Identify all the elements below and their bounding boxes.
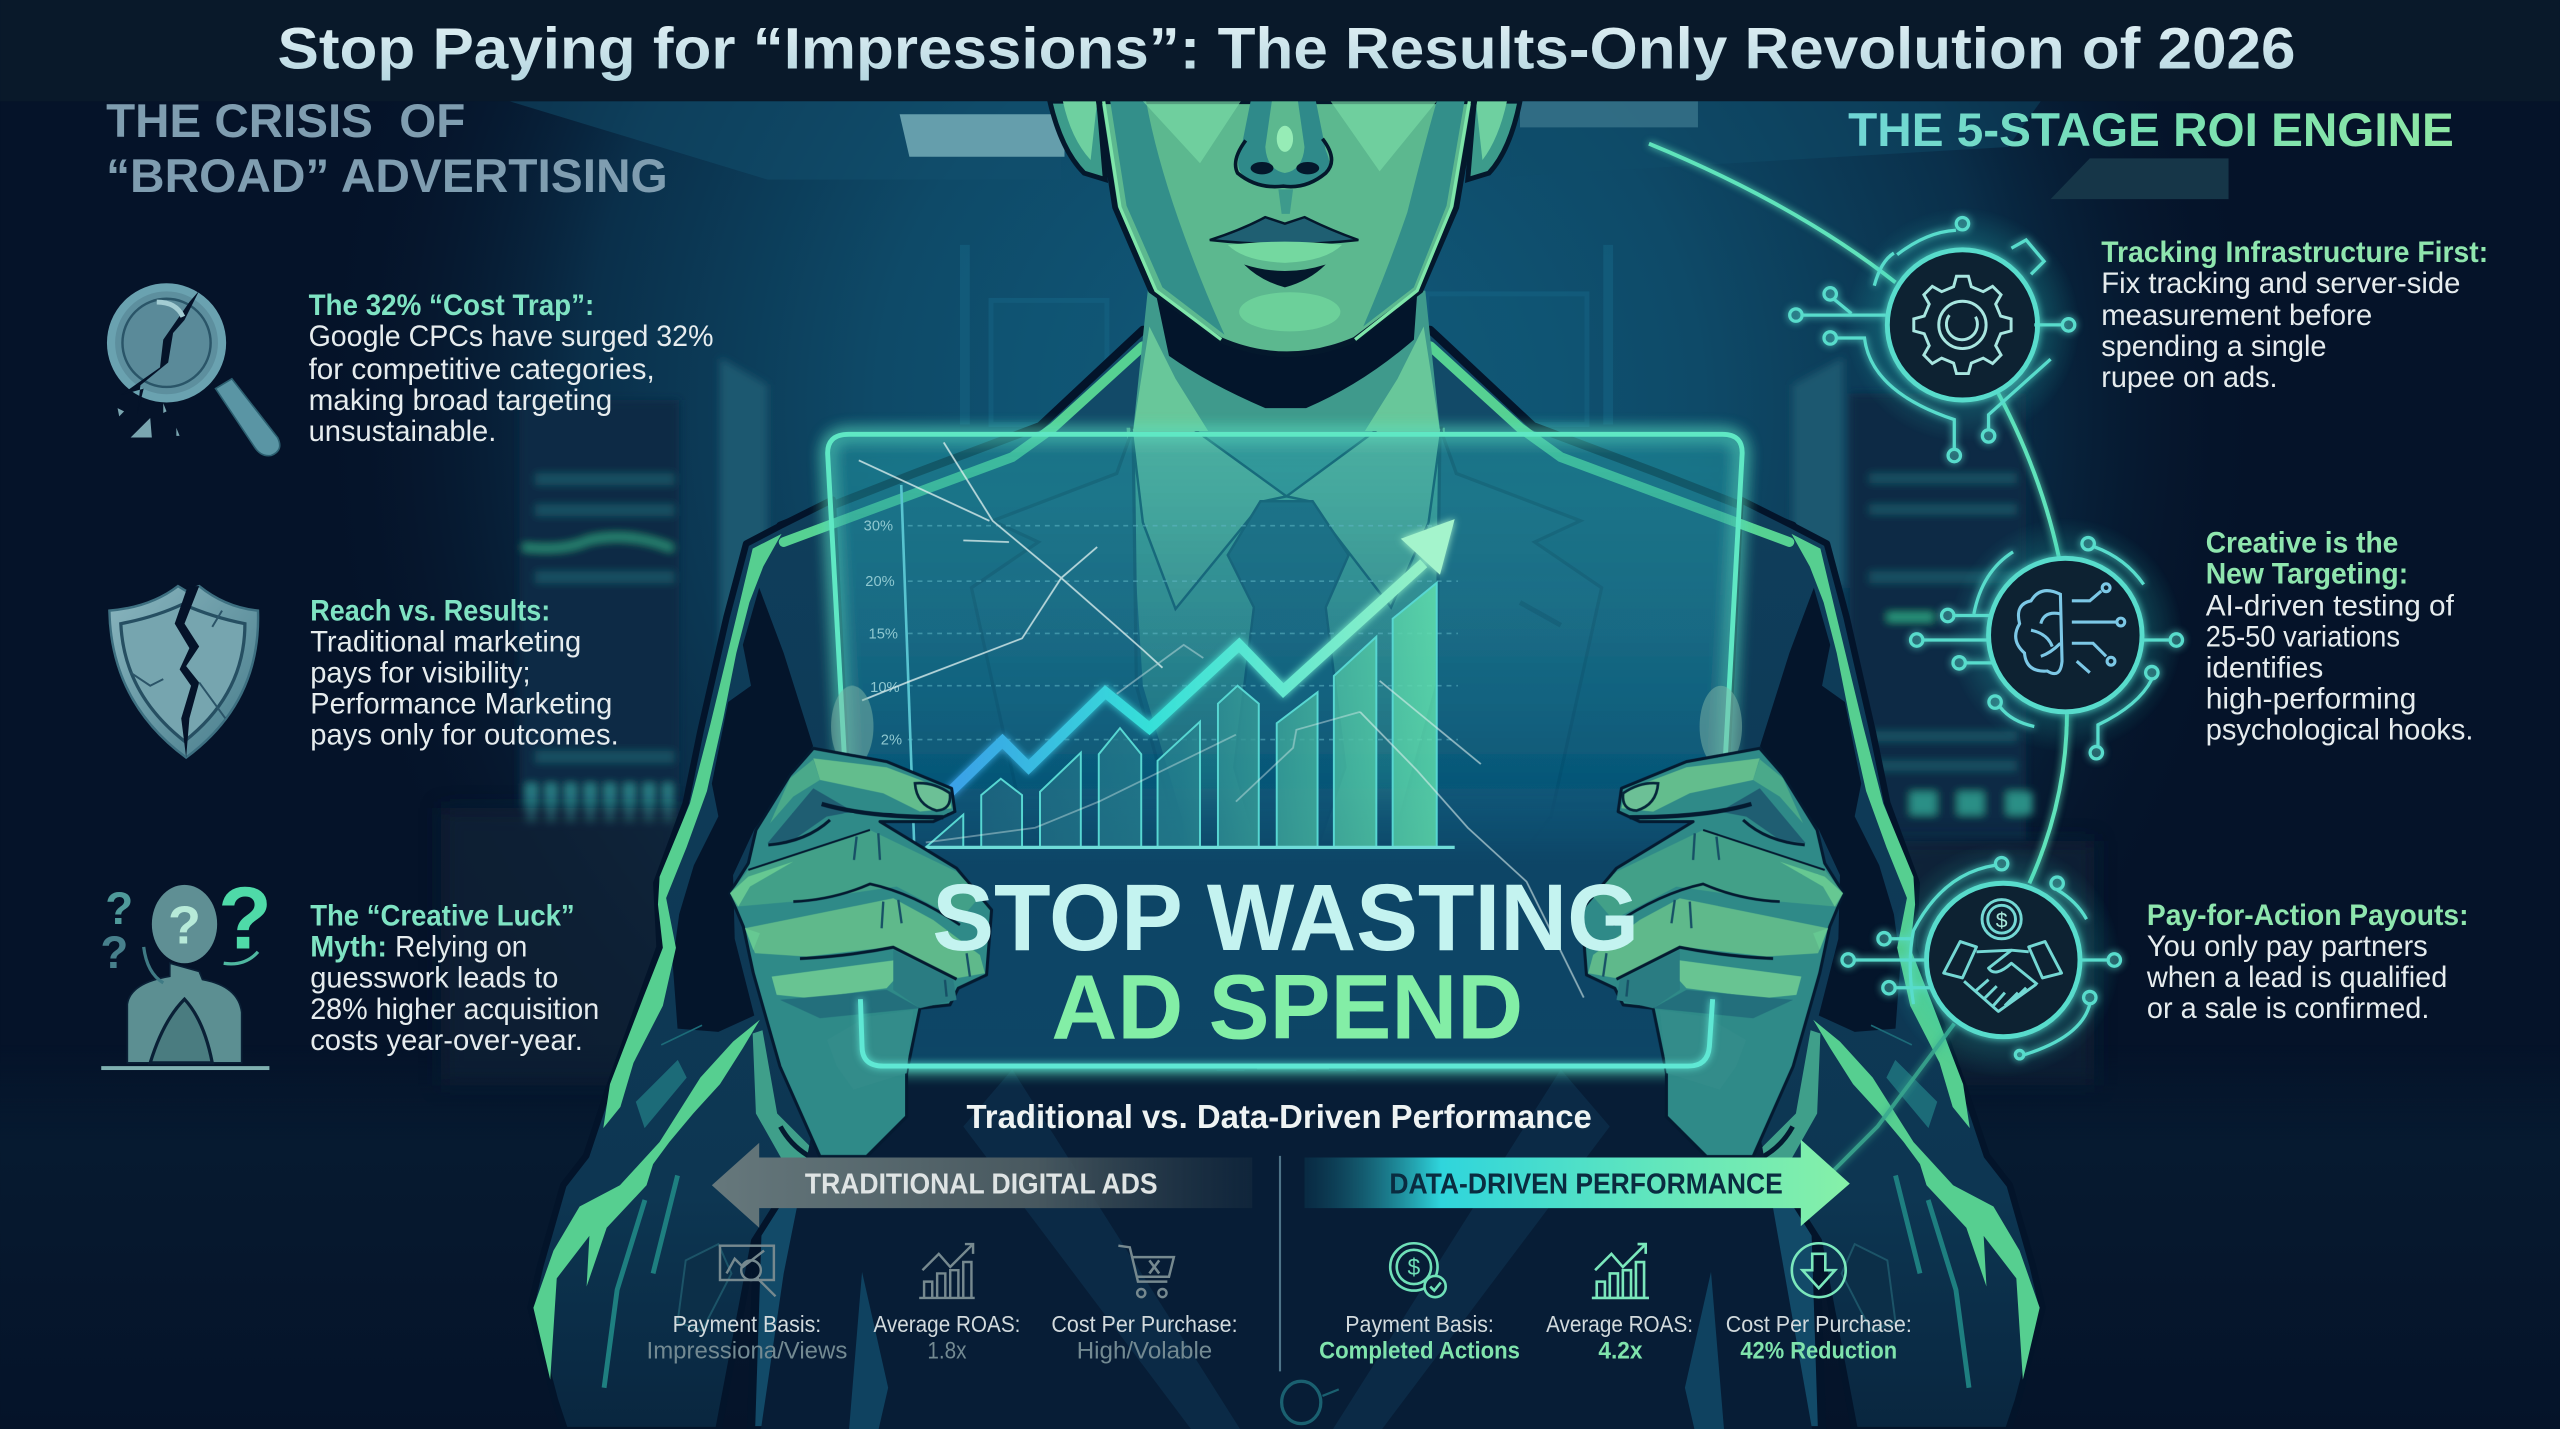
mouth [1210, 217, 1358, 244]
text: the creative luck myth: guesswork leads to [310, 962, 558, 995]
column: traditional cost per purchase: Cost Per Purchase: [1051, 1311, 1238, 1337]
tie [1228, 501, 1349, 882]
column: traditional average ROAS: 1.8x [927, 1338, 967, 1364]
text: creative is the new targeting [2206, 527, 2473, 747]
neck [1133, 291, 1440, 431]
icon: confused figure with question marks: ? [100, 927, 128, 978]
text: the 32% cost trap: unsustainable. [309, 415, 496, 448]
heading: the crisis of broad advertising [106, 95, 668, 203]
icon: confused figure with question marks [100, 869, 272, 1070]
chart grid and axis labels: 20% [865, 574, 895, 590]
shoulder highlights [784, 346, 1789, 542]
text: the creative luck myth: The “Creative Luck” [310, 900, 575, 933]
text: creative is the new targeting: identifies [2206, 652, 2323, 685]
text: pay-for-action payouts: or a sale is confirmed. [2147, 992, 2429, 1025]
text: tracking infrastructure first: Tracking Infrastructure First: [2101, 236, 2488, 269]
chart grid and axis labels [864, 485, 1458, 847]
column: data-driven payment basis [1319, 1243, 1520, 1364]
right arm [1667, 500, 2042, 1429]
heading: the crisis of broad advertising: THE CRISIS OF [106, 95, 465, 148]
text: the 32% cost trap: Google CPCs have surged 32% [309, 320, 713, 353]
column: data-driven cost per purchase [1726, 1243, 1912, 1364]
arrow: data-driven performance [1304, 1140, 1850, 1226]
text: reach vs results: Reach vs. Results: [310, 594, 550, 627]
text: the creative luck myth [310, 900, 599, 1057]
column: data-driven average ROAS: Average ROAS: [1546, 1311, 1693, 1337]
arrow: traditional digital ads [712, 1143, 1252, 1228]
text: reach vs results: pays only for outcomes. [310, 718, 619, 751]
figure: suited man [531, 101, 2042, 1429]
text: tracking infrastructure first: rupee on ads. [2101, 361, 2278, 394]
icon: shopping cart with x [1118, 1246, 1174, 1297]
text: reach vs results: Traditional marketing [310, 625, 581, 658]
left hand holding panel [729, 686, 992, 1157]
chart grid and axis labels: 10% [870, 680, 900, 696]
panel lower edge over wrists [860, 999, 1713, 1066]
column: data-driven cost per purchase: Cost Per Purchase: [1726, 1311, 1912, 1337]
chart grid and axis labels: 30% [864, 519, 893, 535]
icon: cracked shield [109, 586, 258, 758]
column: traditional cost per purchase: High/Volable [1077, 1338, 1212, 1364]
comparison divider [1279, 1156, 1281, 1371]
shirt and collar [1127, 428, 1445, 1069]
heading: the 5-stage ROI engine: THE 5-STAGE ROI ENGINE [1848, 104, 2454, 157]
text: creative is the new targeting: psychological hooks. [2206, 714, 2473, 747]
node 2: AI brain [1911, 518, 2183, 759]
icon: circle with down arrow [1792, 1243, 1846, 1297]
node 1: tracking gear [1790, 207, 2080, 462]
icon: rising bars [919, 1244, 975, 1298]
node 3: pay-for-action handshake [1842, 842, 2121, 1078]
chart grid and axis labels: 2% [881, 732, 902, 748]
title bar [0, 0, 2560, 101]
chart grid and axis labels: 15% [869, 626, 898, 642]
title bar: Stop Paying for “Impressions”: The Results-Only Revolution of 2026 [278, 17, 2296, 82]
text: pay-for-action payouts: Pay-for-Action Payouts: [2147, 899, 2469, 932]
panel headline: STOP WASTING AD SPEND: STOP WASTING [932, 865, 1639, 971]
column: data-driven cost per purchase: 42% Reduction [1740, 1338, 1897, 1364]
text: the creative luck myth: 28% higher acquisition [310, 993, 599, 1026]
face [1099, 101, 1474, 354]
text: the creative luck myth: costs year-over-year. [310, 1024, 583, 1057]
handshake icon [1944, 900, 2062, 1011]
icon: confused figure with question marks: ? [218, 869, 272, 968]
text: tracking infrastructure first: measurement before [2101, 299, 2372, 332]
text: tracking infrastructure first: spending a single [2101, 330, 2327, 363]
icon: coin with check: $ [1408, 1254, 1421, 1280]
text: tracking infrastructure first: Fix tracking and server-side [2101, 267, 2460, 300]
column: data-driven payment basis: Completed Actions [1319, 1338, 1520, 1364]
text: reach vs results: Performance Marketing [310, 687, 612, 720]
text: the 32% cost trap: for competitive categories, [309, 353, 655, 386]
icon: confused figure with question marks: ? [168, 896, 201, 956]
nose [1238, 101, 1329, 187]
text: the 32% cost trap: making broad targeting [309, 384, 612, 417]
jacket button [1282, 1381, 1339, 1424]
text: pay-for-action payouts: You only pay partners [2147, 930, 2428, 963]
column: traditional payment basis: Payment Basis: [673, 1311, 821, 1337]
icon: cracked magnifying glass [111, 287, 280, 456]
handshake icon: $ [1996, 909, 2008, 932]
icon: confused figure with question marks: ? [105, 883, 133, 934]
text: the creative luck myth: Relying on [395, 931, 527, 964]
lower jacket [761, 1069, 1812, 1429]
trend arrow [949, 519, 1455, 793]
arrow: traditional digital ads: TRADITIONAL DIGITAL ADS [805, 1168, 1158, 1200]
column: data-driven average ROAS [1546, 1244, 1693, 1364]
text: creative is the new targeting: Creative is the [2206, 527, 2398, 560]
right hand holding panel [1581, 686, 1844, 1157]
column: traditional cost per purchase [1051, 1246, 1238, 1364]
ears [1050, 101, 1520, 180]
panel headline: STOP WASTING AD SPEND [932, 865, 1639, 1058]
brain icon [2016, 584, 2125, 674]
gear icon [1914, 276, 2011, 374]
text: reach vs results: pays for visibility; [310, 656, 531, 689]
heading: the crisis of broad advertising: “BROAD” ADVERTISING [106, 150, 668, 203]
text: the 32% cost trap [309, 289, 713, 448]
text: pay-for-action payouts [2146, 899, 2469, 1025]
column: traditional payment basis: Impressiona/Views [647, 1338, 847, 1364]
suit body [751, 330, 1822, 1429]
column: data-driven payment basis: Payment Basis: [1345, 1311, 1494, 1337]
column: traditional payment basis [647, 1246, 847, 1364]
text: reach vs results [310, 594, 619, 751]
left arm [531, 500, 906, 1429]
text: tracking infrastructure first [2101, 236, 2488, 394]
text: creative is the new targeting: high-performing [2206, 683, 2416, 716]
text: pay-for-action payouts: when a lead is qualified [2146, 961, 2447, 994]
text: creative is the new targeting: New Targeting: [2206, 558, 2408, 591]
icon: monitor with magnifier [720, 1246, 776, 1296]
column: data-driven average ROAS: 4.2x [1598, 1338, 1642, 1364]
icon: coin with check [1390, 1243, 1446, 1297]
glass cracks [859, 442, 1584, 998]
text: creative is the new targeting: 25-50 variations [2206, 621, 2400, 654]
connector curve: ROI engine path [1649, 144, 2067, 1192]
panel headline: STOP WASTING AD SPEND: AD SPEND [1051, 956, 1523, 1058]
text: the 32% cost trap: The 32% “Cost Trap”: [309, 289, 594, 322]
text: the creative luck myth: Myth: [310, 931, 387, 964]
arrow: data-driven performance: DATA-DRIVEN PERFORMANCE [1389, 1168, 1783, 1200]
text: creative is the new targeting: AI-driven testing of [2206, 590, 2455, 623]
bar chart [926, 583, 1455, 847]
glass panel [828, 434, 1742, 1066]
column: traditional average ROAS: Average ROAS: [873, 1311, 1020, 1337]
icon: rising bars green [1592, 1244, 1649, 1298]
comparison heading: Traditional vs. Data-Driven Performance [967, 1099, 1592, 1136]
column: traditional average ROAS [873, 1244, 1020, 1364]
